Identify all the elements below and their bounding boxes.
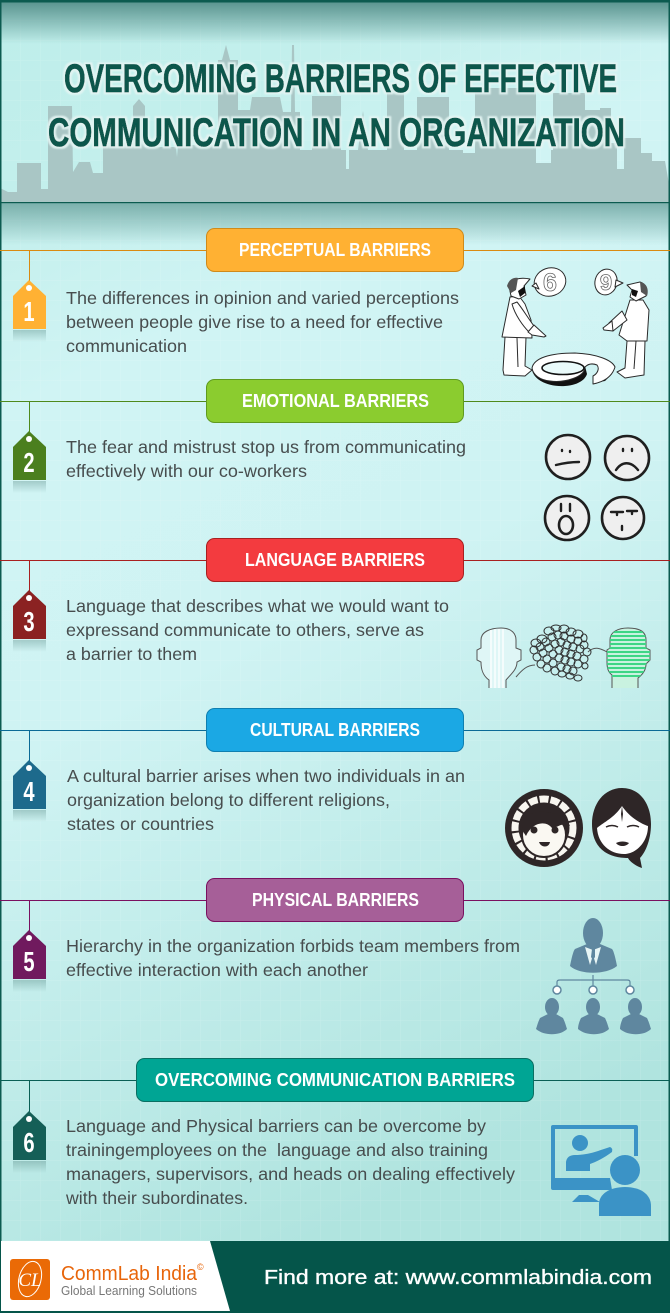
text block 1: communication	[66, 336, 187, 356]
number tag 2: 2	[23, 448, 35, 479]
text block 4: states or countries	[67, 814, 214, 834]
logo mark: CL	[18, 1270, 42, 1291]
number tag 6: 6	[23, 1128, 35, 1159]
number tag 3	[13, 590, 46, 652]
footer band	[0, 1241, 670, 1313]
text block 3: a barrier to them	[66, 644, 197, 664]
section 6: overcoming communication barriers	[0, 1058, 670, 1216]
text block 5	[66, 936, 520, 980]
text block 1	[66, 288, 459, 356]
text block 5: Hierarchy in the organization forbids team members from	[66, 936, 520, 956]
section 5: physical barriers	[0, 878, 670, 1034]
company name: CommLab India	[61, 1263, 198, 1285]
tagline: Global Learning Solutions	[61, 1284, 197, 1298]
tangle scribble	[530, 625, 591, 681]
section 2: emotional barriers	[0, 380, 670, 540]
text block 4	[67, 766, 465, 834]
number tag 4: 4	[23, 777, 35, 808]
text block 6: Language and Physical barriers can be overcome by	[66, 1116, 486, 1136]
heading: perceptual barriers	[206, 228, 464, 272]
heading: cultural barriers: CULTURAL BARRIERS	[250, 719, 420, 740]
text block 3	[66, 596, 449, 664]
text block 3: expressand communicate to others, serve as	[66, 620, 424, 640]
title	[48, 57, 625, 155]
section 1: perceptual barriers	[0, 228, 670, 386]
icon: two men arguing over 6 and 9	[502, 263, 649, 386]
number tag 5	[13, 930, 46, 992]
icon: two men arguing over 6 and 9: 9	[600, 270, 612, 295]
logo mark	[10, 1259, 50, 1300]
section 4: cultural barriers	[0, 708, 670, 868]
heading: perceptual barriers: PERCEPTUAL BARRIERS	[239, 239, 431, 260]
text block 5: effective interaction with each another	[66, 960, 368, 980]
text block 3: Language that describes what we would want to	[66, 596, 449, 616]
number tag 4	[13, 760, 46, 822]
number tag 1	[13, 280, 46, 342]
heading: emotional barriers	[206, 380, 464, 422]
heading: physical barriers: PHYSICAL BARRIERS	[252, 889, 419, 910]
icon: tangled communication between two heads	[477, 625, 655, 688]
text block 4: A cultural barrier arises when two individuals in an	[67, 766, 465, 786]
text block 6	[65, 1116, 515, 1208]
icon: two culturally different faces	[505, 788, 651, 868]
text block 6: managers, supervisors, and heads on dealing effectively	[66, 1164, 515, 1184]
heading: physical barriers	[206, 878, 464, 922]
header skyline	[0, 45, 670, 202]
text block 2: The fear and mistrust stop us from communicating	[66, 437, 466, 457]
text block 1: between people give rise to a need for effective	[66, 312, 443, 332]
section 3: language barriers	[0, 538, 670, 688]
footer logo panel	[1, 1241, 230, 1311]
text block 4: organization belong to different religions,	[67, 790, 390, 810]
number tag 6	[13, 1111, 46, 1173]
text block 6: with their subordinates.	[65, 1188, 248, 1208]
text block 2: effectively with our co-workers	[66, 461, 307, 481]
heading: overcoming communication barriers	[136, 1058, 534, 1102]
icon: two men arguing over 6 and 9: 6	[543, 269, 557, 297]
heading: language barriers: LANGUAGE BARRIERS	[245, 549, 425, 570]
heading: emotional barriers: EMOTIONAL BARRIERS	[242, 390, 429, 411]
number tag 2	[13, 431, 46, 493]
heading: cultural barriers	[206, 708, 464, 752]
text block 6: trainingemployees on the language and also training	[66, 1140, 488, 1160]
text block 2	[66, 437, 466, 481]
number tag 3: 3	[23, 607, 35, 638]
heading: language barriers	[206, 538, 464, 582]
icon: organisation hierarchy	[536, 918, 651, 1034]
icon: four emotion faces	[545, 435, 649, 540]
footer call to action: Find more at: www.commlabindia.com	[264, 1267, 652, 1289]
heading: overcoming communication barriers: OVERCOMING COMMUNICATION BARRIERS	[155, 1069, 515, 1090]
text block 1: The differences in opinion and varied perceptions	[66, 288, 459, 308]
copyright mark: ©	[197, 1262, 204, 1272]
number tag 1: 1	[23, 297, 35, 328]
icon: presenter at a screen	[551, 1125, 651, 1216]
number tag 5: 5	[23, 947, 35, 978]
